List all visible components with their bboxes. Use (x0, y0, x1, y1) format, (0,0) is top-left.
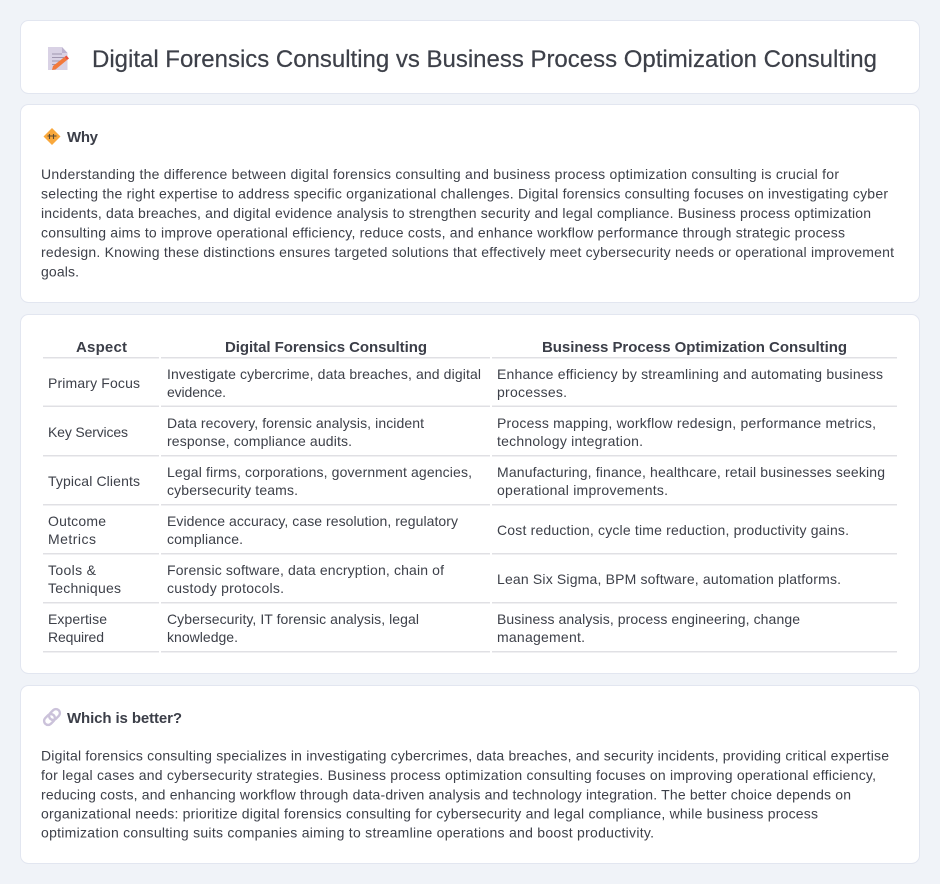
icon: orange diamond sign (44, 128, 60, 145)
title: Digital Forensics Consulting vs Business Process Optimization Consulting (92, 46, 877, 73)
row: key services: Process mapping, workflow redesign, performance metrics, (497, 415, 876, 431)
row: typical clients: operational improvements. (497, 482, 668, 498)
heading: why: Why (67, 129, 99, 146)
text block: which is better paragraph: reducing costs, and enhancing workflow through data-driven analysis and technology integration. The better choice depends on (41, 786, 851, 802)
row: typical clients: Typical Clients (48, 473, 140, 489)
panel: why (20, 104, 920, 302)
table header row: Digital Forensics Consulting (225, 339, 427, 356)
text block: which is better paragraph (41, 748, 889, 840)
row: primary focus: evidence. (167, 384, 226, 400)
row: expertise required: Business analysis, process engineering, change (497, 611, 800, 627)
row: outcome metrics: Evidence accuracy, case resolution, regulatory (167, 513, 458, 529)
panel: which is better (20, 686, 920, 864)
icon: chain link (42, 707, 62, 727)
row: typical clients: Legal firms, corporations, government agencies, (167, 464, 472, 480)
text block: why paragraph: selecting the right expertise to address specific organizational challenges. Digital forensics consulting focuses on investigating cyber (41, 186, 888, 202)
row: primary focus (48, 366, 883, 400)
text block: why paragraph: consulting aims to improve operational efficiency, reduce costs, and enhance workflow performance through strategic process (41, 225, 845, 241)
row: outcome metrics: Outcome (48, 513, 106, 529)
row: expertise required (48, 611, 800, 645)
table header row (76, 339, 847, 356)
row: typical clients: cybersecurity teams. (167, 482, 298, 498)
row: typical clients (48, 464, 885, 498)
table header row: Business Process Optimization Consulting (542, 339, 847, 356)
row: expertise required: knowledge. (167, 629, 238, 645)
text block: why paragraph (41, 166, 894, 280)
row: outcome metrics: Metrics (48, 531, 96, 547)
panel: title header (20, 20, 920, 94)
row: expertise required: Cybersecurity, IT forensic analysis, legal (167, 611, 419, 627)
row: tools and techniques: Techniques (48, 580, 121, 596)
text block: why paragraph: incidents, data breaches, and digital evidence analysis to strengthen security and legal compliance. Business process optimization (41, 205, 871, 221)
text block: which is better paragraph: for legal cases and cybersecurity strategies. Business process optimization consulting focuses on improving operational efficiency, (41, 767, 876, 783)
row: tools and techniques (48, 562, 841, 596)
row: typical clients: Manufacturing, finance, healthcare, retail businesses seeking (497, 464, 885, 480)
row: tools and techniques: Tools & (48, 562, 97, 578)
row: outcome metrics: Cost reduction, cycle time reduction, productivity gains. (497, 522, 849, 538)
row: tools and techniques: Forensic software, data encryption, chain of (167, 562, 444, 578)
text block: why paragraph: Understanding the difference between digital forensics consulting and business process optimization consulting is crucial for (41, 166, 839, 182)
text block: why paragraph: goals. (41, 264, 79, 280)
text block: why paragraph: redesign. Knowing these distinctions ensures targeted solutions that effectively meet cybersecurity needs or operational improvement (41, 244, 894, 260)
row: tools and techniques: Lean Six Sigma, BPM software, automation platforms. (497, 571, 841, 587)
row: key services: technology integration. (497, 433, 643, 449)
row: primary focus: Primary Focus (48, 375, 140, 391)
row: key services: response, compliance audits. (167, 433, 352, 449)
row: tools and techniques: custody protocols. (167, 580, 284, 596)
icon: document with pencil (48, 47, 69, 70)
row: key services: Data recovery, forensic analysis, incident (167, 415, 424, 431)
text block: which is better paragraph: organizational needs: prioritize digital forensics consulting for cybersecurity and legal compliance, while business process (41, 806, 818, 822)
panel: comparison table (20, 314, 920, 674)
row: key services (48, 415, 876, 449)
table header row: Aspect (76, 339, 127, 356)
row: expertise required: management. (497, 629, 585, 645)
row: outcome metrics: compliance. (167, 531, 243, 547)
row: primary focus: processes. (497, 384, 567, 400)
row: outcome metrics (48, 513, 849, 547)
row: expertise required: Expertise (48, 611, 107, 627)
row: primary focus: Investigate cybercrime, data breaches, and digital (167, 366, 481, 382)
row: key services: Key Services (48, 424, 128, 440)
table row rules (43, 357, 897, 652)
heading: which is better: Which is better? (67, 710, 182, 727)
text block: which is better paragraph: Digital forensics consulting specializes in investigating cybercrimes, data breaches, and security incidents, providing critical expertise (41, 748, 889, 764)
row: primary focus: Enhance efficiency by streamlining and automating business (497, 366, 883, 382)
row: expertise required: Required (48, 629, 104, 645)
text block: which is better paragraph: optimization consulting suits companies aiming to streamline operations and boost productivity. (41, 824, 654, 840)
